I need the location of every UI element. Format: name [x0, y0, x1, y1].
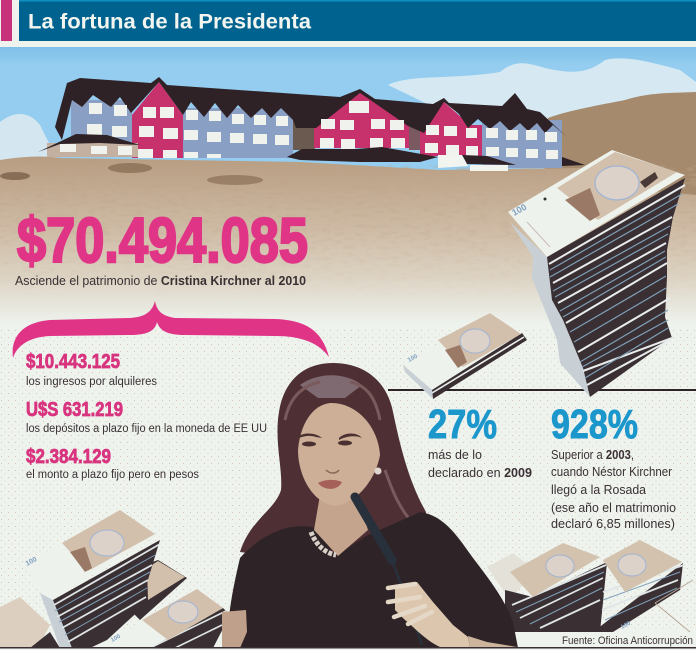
money stacks bottom right — [487, 540, 693, 632]
breakdown list — [26, 351, 267, 481]
stat: 928 percent: Superior a 2003, — [551, 447, 634, 462]
title: La fortuna de la Presidenta — [28, 10, 312, 34]
banknote denomination: 100 — [110, 633, 122, 644]
big money stack — [508, 150, 685, 397]
hair — [240, 363, 426, 560]
hotel walls — [71, 82, 562, 168]
microphone — [355, 497, 392, 560]
peso deposits — [26, 446, 199, 481]
bottom rule — [0, 647, 696, 648]
nose — [326, 470, 339, 473]
stat: 27 percent: 27% — [428, 401, 497, 447]
horizontal rule — [388, 389, 696, 391]
source strip — [480, 632, 696, 647]
body — [227, 512, 518, 648]
peso deposits: $2.384.129 — [26, 446, 111, 468]
dollar deposits: los depósitos a plazo fijo en la moneda de EE UU — [26, 423, 267, 435]
small money stack — [403, 312, 527, 399]
stat: 928 percent: cuando Néstor Kirchner — [551, 464, 673, 479]
total amount: $70.494.085 — [17, 206, 308, 276]
left hand — [222, 610, 247, 648]
neck — [314, 495, 368, 556]
hotel windows — [87, 101, 558, 159]
rent income: $10.443.125 — [26, 351, 120, 373]
banknote denomination: 100 — [620, 620, 632, 631]
hotel roof — [55, 77, 567, 140]
total caption: Asciende el patrimonio de Cristina Kirchner al 2010 — [15, 273, 306, 288]
dollar deposits: U$S 631.219 — [26, 399, 123, 421]
dollar deposits — [26, 399, 267, 435]
rent income — [26, 351, 157, 388]
necklace — [311, 532, 336, 555]
stat: 928 percent: llegó a la Rosada — [551, 482, 647, 497]
stat: 27 percent — [428, 401, 532, 480]
stat: 27 percent: más de lo — [428, 447, 482, 462]
stat: 928 percent: declaró 6,85 millones) — [551, 516, 675, 531]
peso deposits: el monto a plazo fijo pero en pesos — [26, 469, 199, 481]
pink brace — [13, 301, 329, 358]
right hand — [388, 582, 517, 647]
stat: 928 percent — [551, 401, 676, 531]
mouth — [318, 480, 342, 489]
portrait: Cristina Kirchner — [222, 363, 518, 648]
banknote denomination: 100 — [25, 556, 38, 568]
stat: 27 percent: declarado en 2009 — [428, 465, 532, 480]
stat: 928 percent: 928% — [551, 401, 638, 447]
earring — [374, 468, 382, 474]
face — [298, 403, 380, 506]
stat: 928 percent: (ese año el matrimonio — [551, 500, 676, 515]
rent income: los ingresos por alquileres — [26, 376, 157, 388]
lower roofs and van — [38, 134, 585, 171]
header bar — [1, 0, 696, 41]
banknote denomination: 100 — [510, 202, 528, 218]
photo: hotel on the hillside — [0, 47, 696, 330]
banknote denomination: 100 — [407, 353, 419, 364]
brows and eyes — [299, 434, 362, 446]
money stacks bottom left — [0, 509, 230, 648]
background dot texture — [0, 320, 696, 630]
